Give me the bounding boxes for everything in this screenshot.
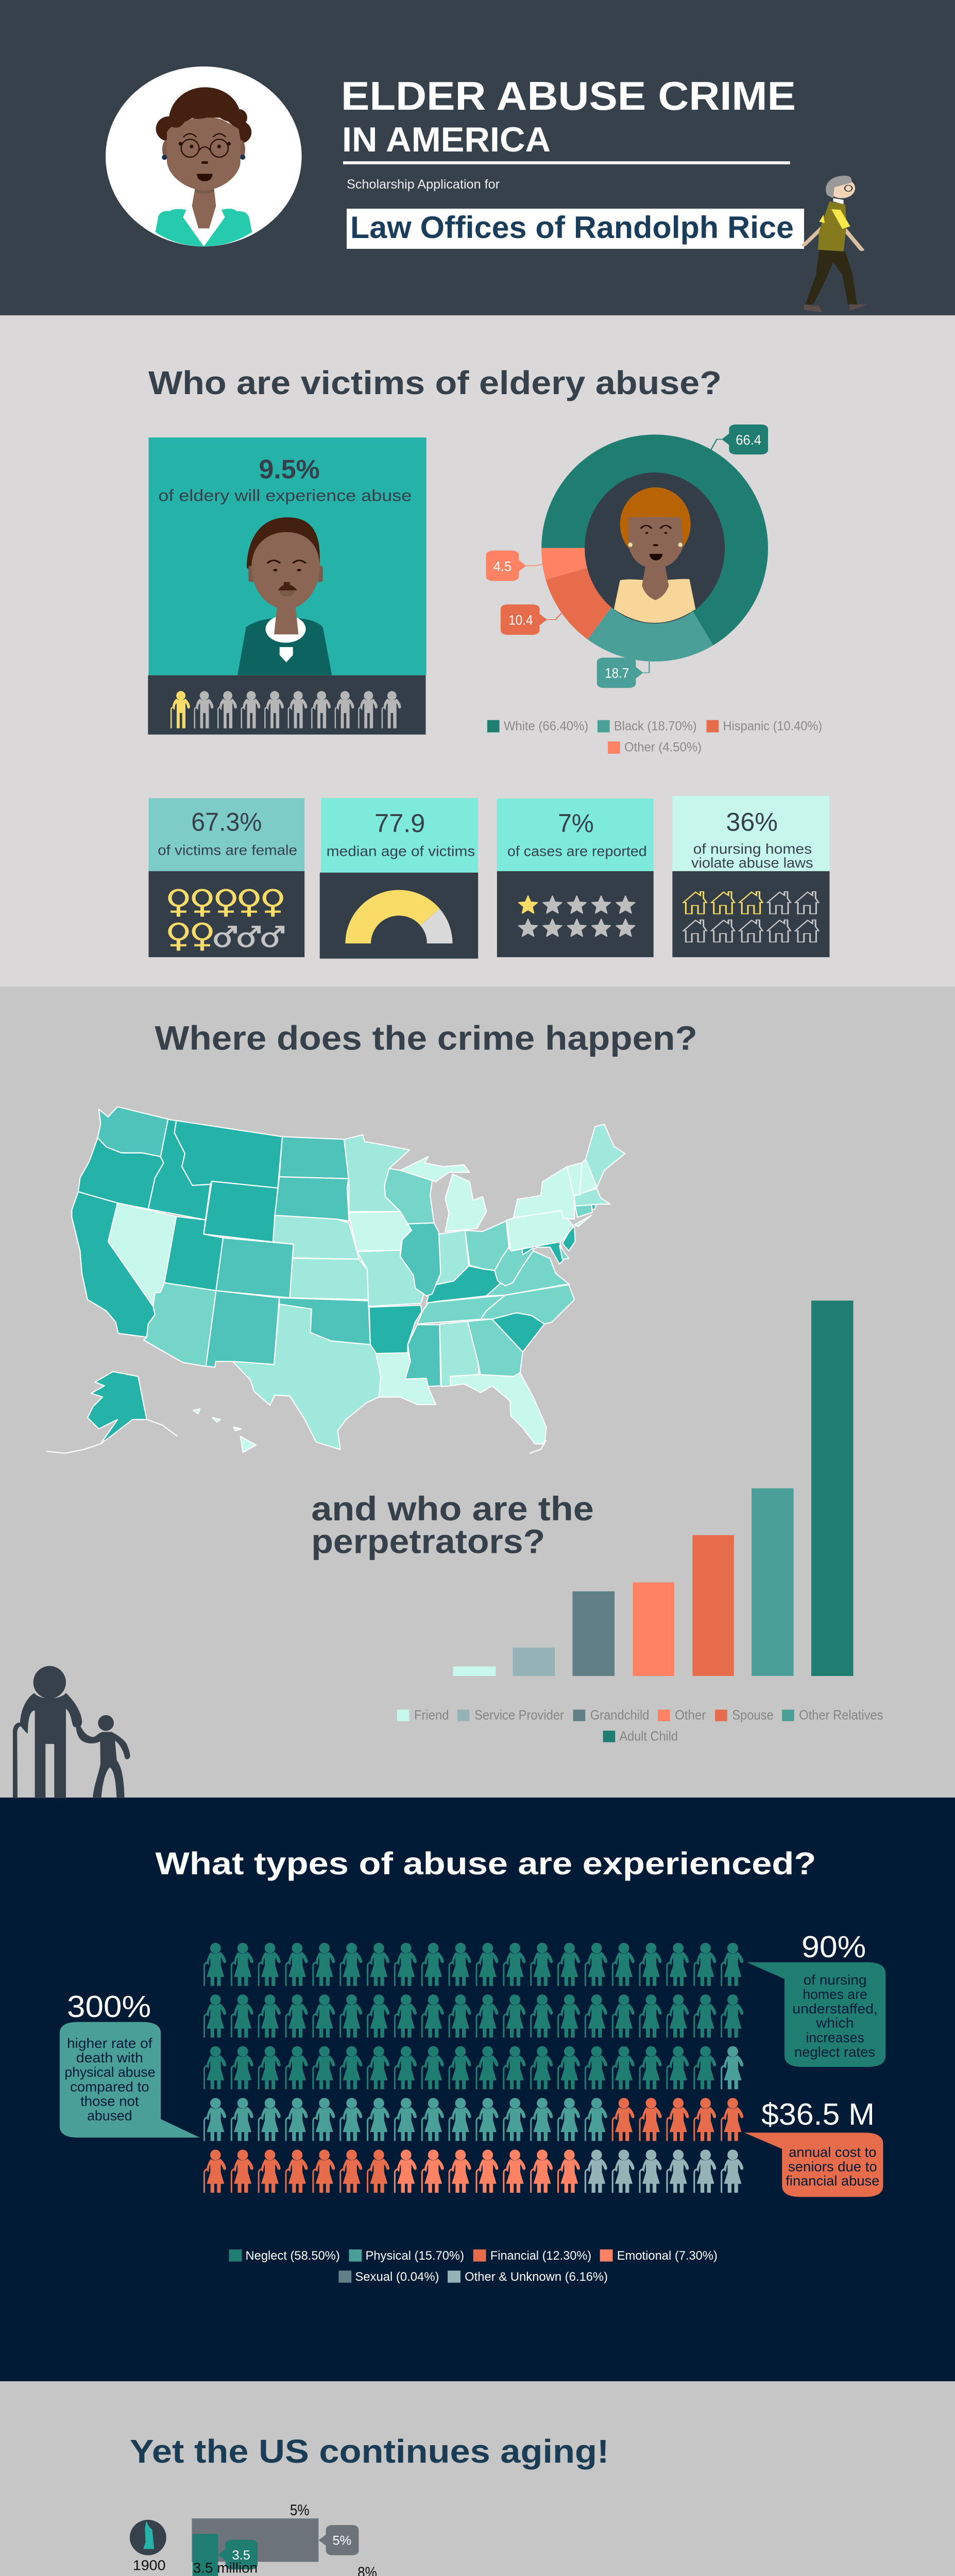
legend: race: White (66.40%) <box>504 719 588 733</box>
panel: 67.3 percent female: 67.3% <box>191 807 262 836</box>
panel: 36 percent nursing homes: violate abuse laws <box>691 855 813 871</box>
icon: woman in donut centre <box>614 487 695 623</box>
heading: who are victims: Who are victims of eldery abuse? <box>148 364 722 401</box>
law office banner: Law Offices of Randolph Rice <box>350 210 794 245</box>
states: fourth tier <box>233 1124 625 1449</box>
heading: and who are the perpetrators <box>311 1490 594 1561</box>
pictogram row 3 <box>203 2046 743 2089</box>
states: lightest tier <box>46 1157 597 1453</box>
legend: abuse types: Sexual (0.04%) <box>355 2269 439 2283</box>
legend: perpetrators: Service Provider <box>474 1708 564 1722</box>
bar: other relatives <box>752 1488 794 1676</box>
bar chart: perpetrators <box>397 1300 883 1743</box>
panel: 36 percent nursing homes: of nursing homes <box>693 841 812 857</box>
bar: adult child <box>811 1300 854 1676</box>
callout: 90 percent: 90% <box>801 1930 866 1964</box>
icon: houses <box>684 892 818 942</box>
legend: abuse types: Other & Unknown (6.16%) <box>465 2269 608 2283</box>
callout: 90 percent: understaffed, <box>792 2001 878 2016</box>
bar: friend <box>453 1667 496 1676</box>
callout: 90 percent: which <box>816 2015 854 2031</box>
callout: 36.5 million: seniors due to <box>788 2159 877 2174</box>
callout: 90 percent: of nursing <box>804 1972 867 1988</box>
header background <box>0 0 955 315</box>
callout: 18.7 <box>597 657 649 688</box>
states: highest tier <box>72 1119 596 1444</box>
title: ELDER ABUSE CRIME <box>341 73 796 118</box>
bar group: 1900: 3.5 <box>232 2548 250 2562</box>
panel: 36 percent nursing homes <box>672 796 829 957</box>
legend: perpetrators: Grandchild <box>590 1708 649 1722</box>
panel: 67.3 percent female: of victims are female <box>158 842 297 858</box>
icon: gender symbols <box>170 890 283 951</box>
panel: abuse callouts and legend <box>60 1930 885 2283</box>
callout: 36.5 million <box>744 2097 883 2197</box>
pictogram row 5 <box>203 2149 743 2193</box>
callout: 36.5 million: annual cost to <box>789 2144 876 2160</box>
panel: 67.3 percent female <box>149 798 304 957</box>
callout: 10.4: 10.4 <box>508 613 533 628</box>
legend: race: Hispanic (10.40%) <box>723 719 822 733</box>
bar: grandchild <box>572 1591 615 1676</box>
icon: star rating <box>519 896 635 936</box>
callout: 90 percent: homes are <box>803 1986 867 2002</box>
heading: and who are the perpetrators: and who are the <box>311 1490 594 1528</box>
legend: perpetrators: Other <box>675 1708 706 1722</box>
legend: abuse types: Physical (15.70%) <box>365 2248 464 2262</box>
callout: 300 percent: 300% <box>67 1989 151 2024</box>
section background: location and perpetrators <box>0 987 955 1798</box>
callout: 300 percent: abused <box>87 2108 132 2123</box>
legend: perpetrators <box>397 1708 883 1743</box>
panel: 9.5 percent card <box>148 437 427 735</box>
legend: race <box>487 719 822 754</box>
gauge chart <box>345 890 453 943</box>
icon: header portrait of woman with glasses <box>106 66 302 246</box>
callout: 10.4 <box>501 604 561 635</box>
legend: abuse types: Emotional (7.30%) <box>617 2248 718 2262</box>
panel: victims section <box>148 425 829 959</box>
icon: man with mustache <box>237 517 332 675</box>
title: IN AMERICA <box>342 120 551 159</box>
icon row: one in ten elders highlighted <box>170 691 401 728</box>
callout: 36.5 million: financial abuse <box>786 2173 879 2189</box>
legend: perpetrators: Friend <box>414 1708 449 1722</box>
bar group: 1900 <box>130 2502 359 2576</box>
panel: 7 percent reported: 7% <box>558 809 594 838</box>
panel: 9.5 percent card: of eldery will experience abuse <box>158 486 412 505</box>
callout: 300 percent: physical abuse <box>64 2064 156 2080</box>
callout: 300 percent: death with <box>76 2050 143 2065</box>
section background: victims <box>0 315 955 987</box>
legend: perpetrators: Other Relatives <box>799 1708 883 1722</box>
heading: and who are the perpetrators: perpetrators? <box>311 1522 545 1561</box>
panel: 9.5 percent card: 9.5% <box>259 454 320 484</box>
icon: elder man and child silhouette <box>13 1666 130 1798</box>
panel: 36 percent nursing homes: 36% <box>726 807 778 836</box>
icon: elderly man walking <box>804 176 868 312</box>
callout: 66.4: 66.4 <box>736 432 761 448</box>
section background: aging <box>0 2381 955 2576</box>
states: third tier <box>144 1168 592 1377</box>
legend: race: Other (4.50%) <box>624 740 702 754</box>
pictogram: 100 elder women by abuse type <box>203 1943 743 2193</box>
bar group: 1900: 5% <box>333 2533 351 2548</box>
callout: 4.5: 4.5 <box>493 559 511 574</box>
donut chart: victims by race <box>541 435 768 662</box>
pictogram row 1 <box>203 1943 743 1986</box>
legend: perpetrators: Adult Child <box>620 1728 678 1743</box>
callout: 90 percent <box>747 1930 885 2067</box>
bar: service provider <box>513 1648 555 1676</box>
panel: 7 percent reported <box>497 799 654 957</box>
legend: abuse types: Financial (12.30%) <box>490 2248 591 2262</box>
bar group: 1900: 1900 <box>133 2557 166 2573</box>
section background: abuse types <box>0 1798 955 2381</box>
heading: yet the US continues aging: Yet the US continues aging! <box>130 2433 609 2470</box>
map: US states choropleth <box>46 1107 625 1453</box>
legend: race: Black (18.70%) <box>614 719 697 733</box>
subtitle: Scholarship Application for <box>347 177 500 192</box>
callout: 300 percent: higher rate of <box>67 2036 152 2051</box>
callout: 4.5 <box>486 551 543 581</box>
states: second tier <box>98 1107 441 1386</box>
callout: 36.5 million: $36.5 M <box>761 2097 875 2131</box>
bar: spouse <box>692 1535 734 1676</box>
callout: 18.7: 18.7 <box>605 666 629 681</box>
pictogram row 2 <box>203 1994 743 2038</box>
heading: where does the crime happen: Where does the crime happen? <box>155 1020 697 1058</box>
callout: 300 percent: those not <box>80 2093 139 2109</box>
panel: median age: median age of victims <box>327 843 475 859</box>
legend: perpetrators: Spouse <box>732 1708 774 1722</box>
bar: other <box>633 1582 674 1676</box>
panel: median age <box>320 798 478 959</box>
pictogram row 4 <box>203 2098 743 2141</box>
callout: 90 percent: increases <box>806 2030 864 2045</box>
callout: 300 percent: compared to <box>70 2079 149 2095</box>
bar group: 1900: 3.5 million <box>193 2560 258 2576</box>
callout: 66.4 <box>711 425 768 454</box>
callout: 90 percent: neglect rates <box>794 2044 875 2060</box>
legend: abuse types: Neglect (58.50%) <box>246 2248 340 2262</box>
legend: abuse types <box>229 2248 718 2283</box>
panel: aging chart section <box>125 2433 949 2576</box>
panel: median age: 77.9 <box>374 809 425 838</box>
panel: 7 percent reported: of cases are reported <box>507 843 647 859</box>
title <box>341 73 796 159</box>
bar group: 1900: 5% <box>290 2502 310 2519</box>
callout: 300 percent <box>60 1989 200 2138</box>
